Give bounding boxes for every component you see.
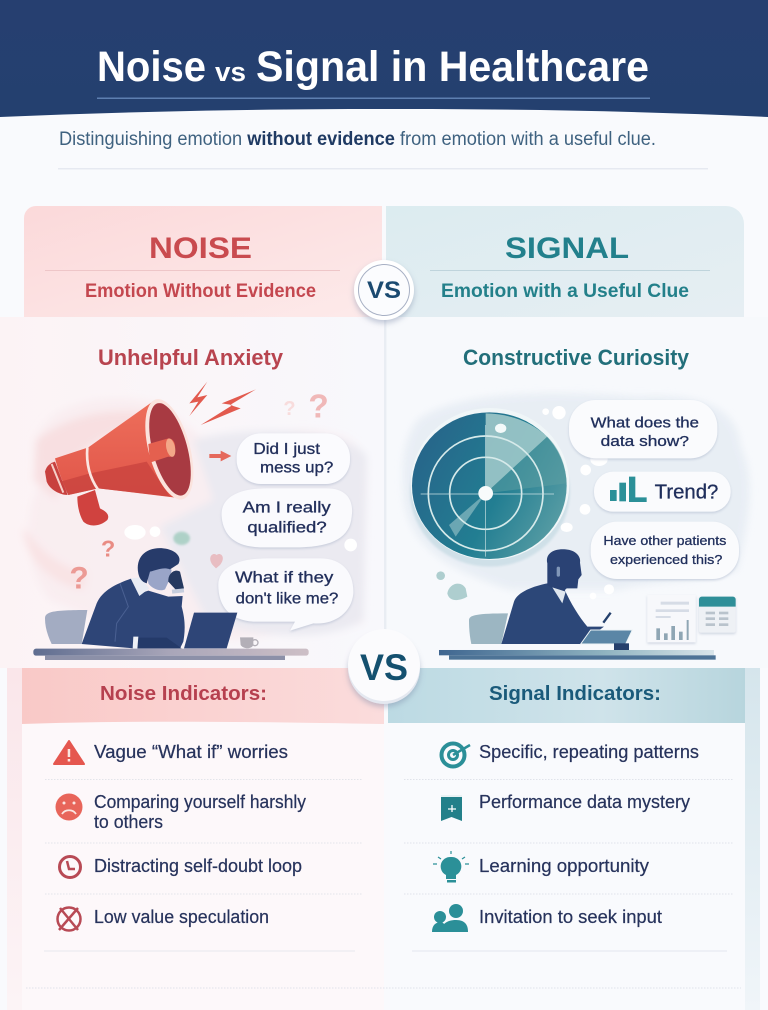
row: low value speculation: [58, 906, 269, 930]
row: self-doubt loop: Distracting self-doubt loop: [94, 855, 302, 876]
backdrop: [403, 393, 750, 590]
illustration: noise: [23, 382, 367, 660]
icon: calendar: [699, 597, 736, 633]
bubble: have other patients: Have other patients: [603, 533, 727, 548]
vs badge centre: VS: [360, 647, 408, 688]
bubble: what if they: don't like me?: [236, 590, 338, 607]
row: patterns: Specific, repeating patterns: [479, 741, 699, 762]
bubble: what does the data show: [569, 400, 717, 458]
illustration: signal: [403, 393, 750, 660]
title: Noise: [97, 43, 206, 91]
heading: Signal Indicators:: [489, 683, 661, 705]
question marks: ?: [283, 398, 296, 420]
signal title: SIGNAL: [505, 232, 629, 265]
question marks: [69, 388, 329, 595]
thought dots: [124, 525, 357, 551]
question marks: ?: [69, 559, 89, 595]
vs badge top: VS: [367, 277, 401, 304]
row: invitation: Invitation to seek input: [479, 906, 662, 927]
thinking person at desk: [439, 549, 716, 660]
row: low value speculation: Low value speculation: [94, 906, 269, 927]
bubble: am I really: [222, 488, 352, 547]
thought dots: [542, 406, 614, 599]
row: learning: [433, 851, 650, 882]
bubble: did I just: Did I just: [253, 441, 321, 458]
header banner: [0, 0, 768, 117]
panel: signal header: [386, 206, 744, 317]
panel: signal indicators: [388, 668, 760, 1010]
bubble: trend: [594, 472, 731, 512]
row: performance data: Performance data mystery: [479, 791, 691, 812]
question marks: ?: [308, 388, 329, 425]
worried person at desk: [33, 548, 309, 660]
divider bottom: [26, 987, 741, 989]
icon: mini bars: [610, 477, 647, 502]
panel: noise header: Emotion Without Evidence: [85, 281, 316, 302]
title: Signal in Healthcare: [256, 43, 649, 91]
vs badge centre: [348, 629, 420, 704]
column backgrounds: [0, 317, 768, 668]
heading: constructive curiosity: Constructive Curiosity: [463, 345, 690, 370]
panel: noise indicators: [7, 668, 384, 1010]
bubble: what does the data show: What does the: [591, 415, 699, 431]
icon: radar: [410, 408, 570, 567]
bubble: did I just: [237, 433, 350, 484]
panel: noise header: [24, 206, 382, 317]
question marks: ?: [101, 536, 115, 562]
row: performance data: [441, 791, 691, 821]
bubble: am I really: Am I really: [243, 500, 331, 517]
row: comparing: [56, 791, 307, 832]
heading: Noise Indicators:: [100, 683, 267, 705]
bubble: have other patients: [591, 522, 739, 579]
small decor: [436, 571, 467, 600]
small arrow: [209, 451, 231, 461]
heading: unhelpful anxiety: Unhelpful Anxiety: [98, 345, 284, 370]
bubble: have other patients: experienced this?: [610, 552, 722, 567]
bubble: trend: Trend?: [655, 481, 718, 503]
row: learning: Learning opportunity: [479, 855, 650, 876]
bubble: what does the data show: data show?: [601, 434, 689, 450]
swirl backdrop: [23, 398, 367, 640]
bubble: what if they: What if they: [235, 570, 333, 587]
icon: lightning bolts: [189, 382, 207, 416]
bubble: am I really: qualified?: [247, 520, 327, 537]
row: vague worries: Vague “What if” worries: [94, 741, 288, 762]
noise title: NOISE: [149, 232, 252, 265]
icon: megaphone: [45, 382, 256, 525]
row: comparing: Comparing yourself harshly: [94, 791, 307, 812]
subtitle: Distinguishing emotion without evidence from emotion with a useful clue.: [59, 129, 656, 150]
vs badge top: [354, 260, 414, 320]
row: patterns: [442, 741, 699, 766]
row: invitation: [432, 904, 662, 932]
title: vs: [215, 57, 246, 87]
panel: signal header: Emotion with a Useful Clue: [441, 281, 689, 302]
title: [97, 43, 649, 91]
row: comparing: to others: [94, 811, 163, 832]
bubble: did I just: mess up?: [260, 460, 333, 477]
icon: report: [647, 595, 696, 642]
bubble: what if they: [218, 558, 353, 631]
